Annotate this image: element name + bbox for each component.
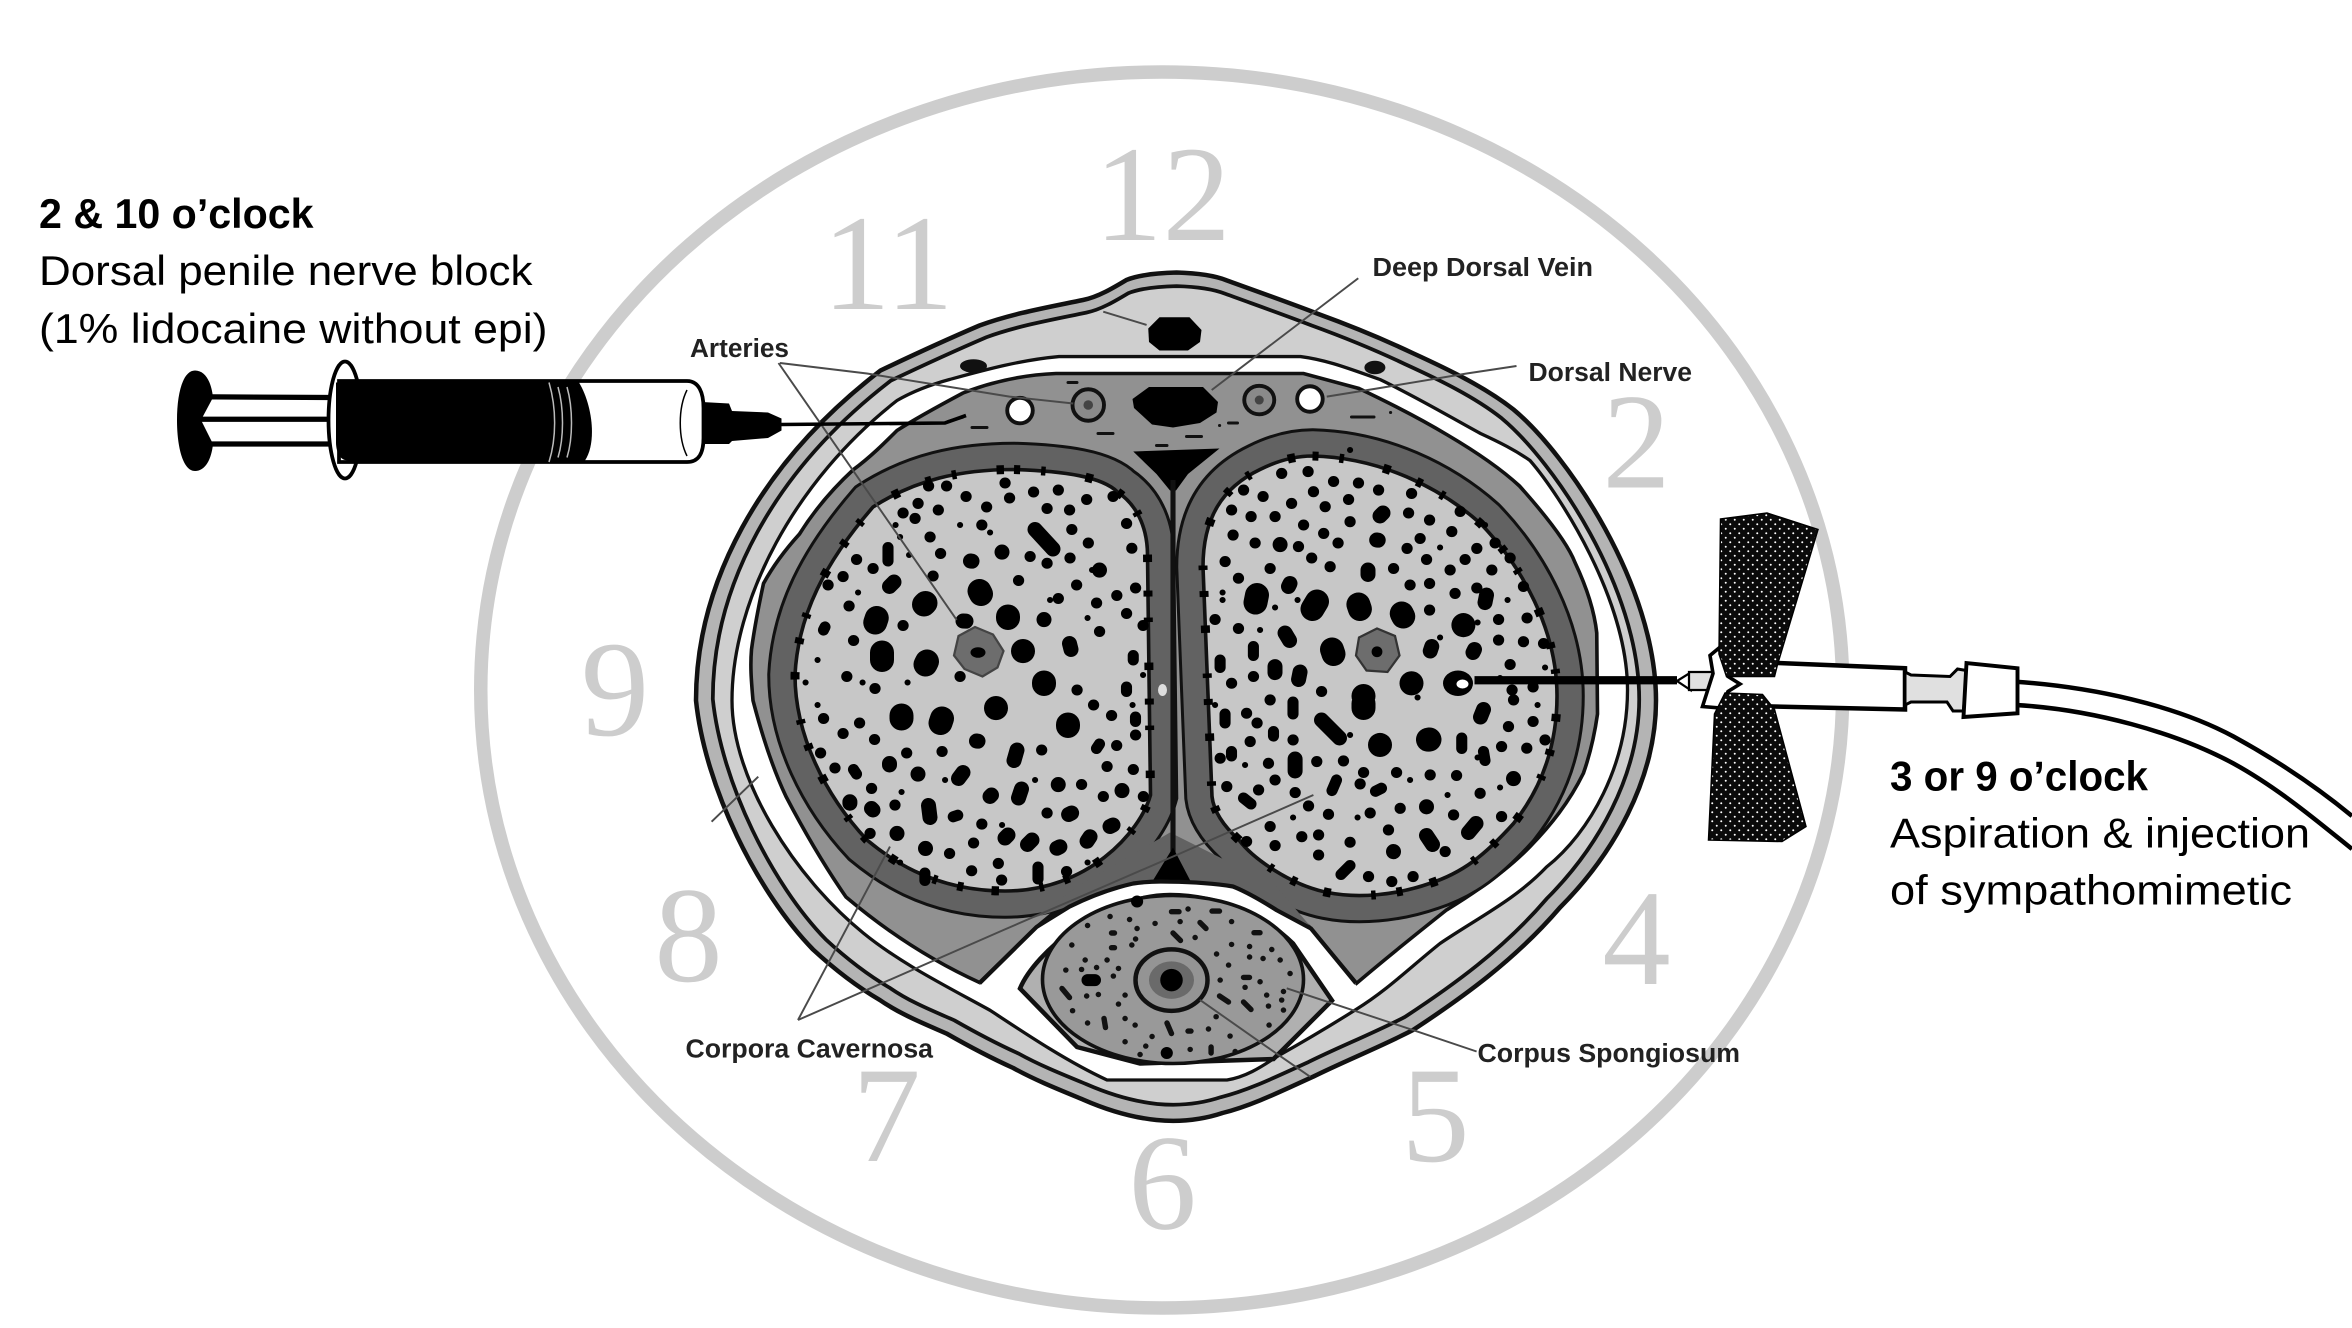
cavernous spaces small xyxy=(820,472,1545,882)
icon: butterfly needle xyxy=(1474,513,2352,849)
anatomical cross-section xyxy=(696,273,1656,1121)
label: Deep Dorsal Vein: Deep Dorsal Vein xyxy=(1372,254,1593,282)
corpus spongiosum inner xyxy=(1042,896,1304,1064)
clock numerals: 6 xyxy=(1128,1107,1197,1259)
cavernous spaces large xyxy=(875,591,1463,745)
needle tip cone xyxy=(1677,674,1690,690)
dorsal artery right xyxy=(1244,386,1274,414)
spongiosum spaces xyxy=(1062,909,1290,1055)
barrel fluid xyxy=(336,383,592,461)
clock numerals: 11 xyxy=(822,187,954,339)
small hub xyxy=(1689,672,1714,690)
left corpus cavernosum xyxy=(795,470,1150,891)
dorsal white nerve left xyxy=(1007,398,1033,423)
serrated lobe edges xyxy=(795,456,1557,896)
icon: syringe xyxy=(177,362,966,479)
clock face ring xyxy=(481,72,1843,1308)
connector xyxy=(1905,669,1966,711)
tube cap xyxy=(1964,663,2018,717)
label: Corpora Cavernosa: Corpora Cavernosa xyxy=(686,1036,934,1064)
clock numerals: 5 xyxy=(1401,1039,1470,1191)
dorsal artery left xyxy=(1072,389,1104,421)
small dorsal spots xyxy=(960,359,1385,374)
cavernous spaces medium xyxy=(850,513,1514,852)
white channel around corpus spongiosum xyxy=(980,881,1356,984)
plunger ring highlights xyxy=(549,383,572,462)
clock numerals: 4 xyxy=(1602,862,1671,1014)
plunger thumb rest xyxy=(177,371,213,471)
clock numerals: 9 xyxy=(581,613,649,765)
white dot on septum xyxy=(1158,684,1167,696)
plunger rods xyxy=(195,396,330,444)
callout: dorsal nerve block: Dorsal penile nerve block xyxy=(39,247,534,294)
bottom wing xyxy=(1708,693,1806,842)
loose connective white space xyxy=(732,357,1628,1080)
cavernous sinus ring with needle tip xyxy=(1443,671,1473,696)
label: Dorsal Nerve: Dorsal Nerve xyxy=(1528,359,1692,387)
top wing xyxy=(1719,513,1818,677)
tunica fill xyxy=(795,456,1557,896)
inner barrel mark xyxy=(680,390,687,456)
clock numerals: 2 xyxy=(1602,366,1671,518)
septum wedge top and line xyxy=(1133,449,1220,882)
Buck's fascia region xyxy=(751,374,1598,983)
callout: aspiration and injection: of sympathomimetic xyxy=(1890,867,2292,914)
dorsal white nerve right xyxy=(1297,386,1323,412)
spongiosum dark marks xyxy=(1088,902,1167,1053)
needle shaft xyxy=(1474,678,1677,683)
corpus spongiosum outer xyxy=(1020,895,1332,1064)
leader lines xyxy=(712,278,1516,1077)
label: Corpus Spongiosum: Corpus Spongiosum xyxy=(1478,1040,1740,1068)
left corpus tunica outline xyxy=(795,470,1150,891)
barrel flange xyxy=(328,362,362,479)
callout: aspiration and injection: Aspiration & injection xyxy=(1890,810,2310,857)
dartos layer and dorsal tissue xyxy=(713,286,1639,1105)
urethra xyxy=(1136,949,1208,1011)
outer skin layer xyxy=(696,273,1656,1121)
cavernous spaces tiny xyxy=(806,450,1545,863)
clock numerals: 8 xyxy=(654,859,723,1011)
deep dorsal vein xyxy=(1132,387,1218,428)
right corpus cavernosum xyxy=(1203,456,1557,896)
luer hub xyxy=(702,402,782,444)
right cavernosal artery xyxy=(1356,629,1400,672)
callout: dorsal nerve block xyxy=(39,190,548,352)
callout: aspiration and injection xyxy=(1890,753,2310,914)
needle xyxy=(782,416,966,425)
clock numerals: 12 xyxy=(1094,118,1231,270)
callout: aspiration and injection: 3 or 9 o’clock xyxy=(1890,753,2149,800)
callout: dorsal nerve block: 2 & 10 o’clock xyxy=(39,190,314,237)
left cavernosal artery xyxy=(954,627,1004,677)
dorsal small vessels xyxy=(948,383,1391,446)
clock numerals: 7 xyxy=(852,1039,921,1191)
tube body xyxy=(1719,662,1905,710)
right corpus tunica outline xyxy=(1203,456,1557,896)
tubing xyxy=(2016,682,2352,849)
tunica filler near urethral groove xyxy=(1034,833,1320,938)
superficial dorsal vein xyxy=(1148,317,1202,351)
barrel xyxy=(339,381,704,462)
callout: dorsal nerve block: (1% lidocaine without epi) xyxy=(39,305,548,352)
left flange xyxy=(1702,648,1740,708)
label: Arteries: Arteries xyxy=(690,335,789,363)
clock numerals xyxy=(581,118,1671,1259)
